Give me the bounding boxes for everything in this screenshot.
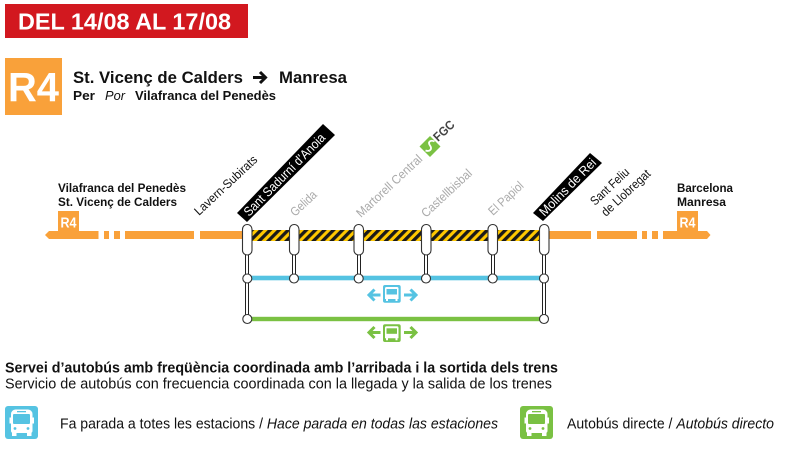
icon: blue bus legend (5, 406, 38, 439)
green direct bus line (247, 317, 544, 321)
station label: Sant Sadurní d'Anoia: Sant Sadurní d’Anoia (240, 130, 329, 219)
station label: Molins de Rei: Molins de Rei (536, 155, 599, 219)
orange rail line right (544, 211, 710, 239)
station label: Gelida: Gelida (287, 188, 320, 219)
station label: Sant Feliu de Llobregat: Sant Feliu (587, 165, 632, 208)
station label: Lavern-Subirats: Lavern-Subirats (191, 153, 260, 218)
station label: Castellbisbal: Castellbisbal (418, 166, 475, 220)
icon: green bus legend (520, 406, 553, 439)
closed track hazard stripes (247, 230, 544, 241)
station label: El Papiol: El Papiol (485, 179, 526, 218)
orange rail line left: R4 (60, 216, 76, 232)
route title: St. Vicenç de Calders (73, 68, 243, 87)
blue bus with arrows (368, 285, 416, 303)
date banner: DEL 14/08 AL 17/08 (18, 8, 231, 34)
service note (5, 360, 558, 392)
orange rail line right: R4 (680, 216, 696, 232)
station label: Sant Feliu de Llobregat: de Llobregat (598, 166, 654, 219)
route title: Vilafranca del Penedès (135, 88, 276, 103)
right terminus label (677, 181, 733, 209)
route title: Por (105, 88, 126, 103)
line badge R4: R4 (8, 64, 59, 110)
FGC logo (420, 118, 458, 157)
orange rail line left (45, 211, 247, 239)
left terminus label: St. Vicenç de Calders (58, 195, 177, 209)
green bus with arrows (368, 324, 416, 342)
right terminus label: Barcelona (677, 181, 733, 195)
legend text: stopping bus: Fa parada a totes les estacions / Hace parada en todas las estaciones (60, 416, 498, 432)
date banner (5, 4, 248, 38)
FGC logo: FGC (430, 118, 458, 144)
station label: Martorell Central: Martorell Central (353, 152, 425, 220)
station capsules (242, 224, 549, 255)
left terminus label: Vilafranca del Penedès (58, 181, 186, 195)
blue stopping bus line (247, 276, 544, 280)
route title: Manresa (279, 68, 348, 87)
service note: Servicio de autobús con frecuencia coordinada con la llegada y la salida de los trenes (5, 376, 552, 392)
service note: Servei d’autobús amb freqüència coordinada amb l’arribada i la sortida dels trens (5, 360, 558, 376)
legend text: direct bus: Autobús directe / Autobús directo (567, 416, 774, 432)
left terminus label (58, 181, 186, 209)
route title (73, 68, 348, 103)
right terminus label: Manresa (677, 195, 726, 209)
bus stop circles (243, 274, 549, 324)
route title: Per (73, 88, 95, 103)
station connectors (246, 250, 546, 319)
